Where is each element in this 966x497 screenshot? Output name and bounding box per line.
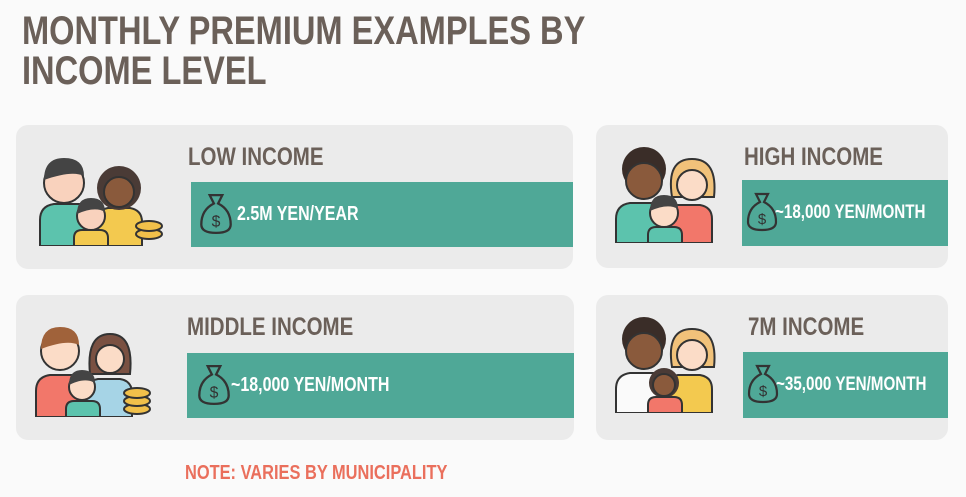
value text: 2.5M YEN/YEAR [237,203,359,225]
value bar: high income [742,180,948,246]
icon: money bag: $ [759,383,768,400]
icon: money bag [200,194,232,234]
heading: high income: HIGH INCOME [744,143,883,171]
icon: money bag: $ [210,385,219,402]
value bar: middle income [187,353,574,418]
panel: low income [16,125,573,269]
value text: ~18,000 YEN/MONTH [231,374,389,396]
value text: ~35,000 YEN/MONTH [776,374,927,395]
panel: high income [596,125,948,268]
panel: 7M income [596,295,948,440]
icon: family 7M [615,317,716,413]
icon: money bag: $ [758,211,767,228]
panel: middle income [16,295,574,440]
icon: family high [615,147,716,243]
icon: family low [39,158,163,246]
icon: money bag [198,365,230,405]
icon: money bag [748,364,778,404]
value text: ~18,000 YEN/MONTH [775,202,926,223]
value bar: low income [191,182,573,247]
icon: money bag [746,192,778,232]
note: NOTE: VARIES BY MUNICIPALITY [185,462,447,484]
value bar: 7M income [743,352,948,418]
heading: middle income: MIDDLE INCOME [187,313,353,341]
title: MONTHLY PREMIUM EXAMPLES BY [22,9,585,53]
heading: 7M income: 7M INCOME [748,313,864,341]
title: INCOME LEVEL [22,49,267,93]
icon: money bag: $ [212,214,221,231]
title [22,9,585,93]
icon: family middle [35,327,151,417]
heading: low income: LOW INCOME [188,143,324,171]
